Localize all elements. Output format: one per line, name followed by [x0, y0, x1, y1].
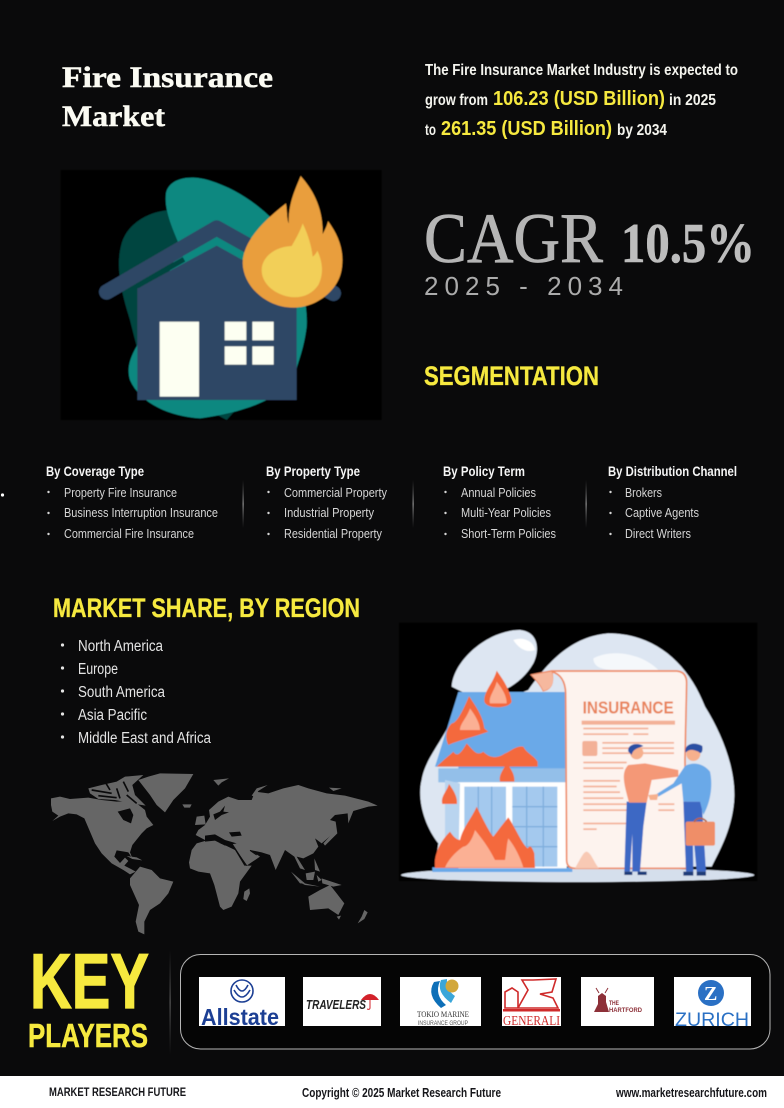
title: Market [62, 100, 165, 133]
region list: North America [78, 638, 163, 655]
cagr [424, 200, 755, 301]
segment: by property type [266, 463, 387, 541]
segment: by distribution channel: Captive Agents [625, 505, 699, 520]
segment: by coverage type: Business Interruption Insurance [64, 505, 218, 520]
market forecast summary: grow from [425, 92, 488, 109]
cagr: 2025 - 2034 [424, 271, 623, 301]
key players heading: PLAYERS [28, 1017, 148, 1054]
segment: by policy term [443, 463, 556, 541]
market share heading: MARKET SHARE, BY REGION [53, 593, 360, 623]
logo: the hartford: THE [609, 1001, 619, 1007]
market forecast summary: 261.35 (USD Billion) [441, 118, 612, 140]
segment: by policy term: By Policy Term [443, 463, 525, 479]
footer: Copyright © 2025 Market Research Future [302, 1086, 501, 1100]
segment: by property type: Industrial Property [284, 505, 374, 520]
man in blue with briefcase [648, 744, 715, 876]
segment: by distribution channel: By Distribution Channel [608, 463, 737, 479]
logo: zurich: Z [704, 983, 717, 1005]
logo: allstate [199, 977, 285, 1030]
region list: Europe [78, 661, 118, 678]
logo: generali [502, 977, 561, 1028]
segment: by property type: By Property Type [266, 463, 360, 479]
logo: travelers: TRAVELERS [306, 997, 366, 1012]
market forecast summary: 106.23 (USD Billion) [493, 88, 665, 110]
logo: allstate: Allstate [201, 1004, 279, 1030]
key players heading [28, 937, 149, 1054]
illustration: house on fire icon [61, 170, 382, 420]
market forecast summary [425, 62, 738, 140]
logo: tokio marine: TOKIO MARINE [417, 1010, 469, 1019]
world map [51, 773, 378, 934]
title [62, 61, 273, 133]
segmentation heading: SEGMENTATION [424, 361, 599, 391]
segment: by coverage type [46, 463, 218, 541]
illustration: insurance handshake and burning building [399, 623, 757, 882]
segment: by policy term: Multi-Year Policies [461, 505, 551, 520]
footer: MARKET RESEARCH FUTURE [49, 1085, 186, 1099]
title: Fire Insurance [62, 61, 273, 94]
region list: Middle East and Africa [78, 730, 211, 747]
segment: by property type: Residential Property [284, 526, 382, 541]
insurance document [532, 671, 687, 868]
market forecast summary: in 2025 [669, 92, 716, 109]
segment: by coverage type: By Coverage Type [46, 463, 144, 479]
segment: by distribution channel: Brokers [625, 485, 662, 500]
region list: Asia Pacific [78, 707, 147, 724]
logo: the hartford: HARTFORD [609, 1008, 643, 1014]
logo: zurich [674, 977, 751, 1031]
segment: by coverage type: Property Fire Insurance [64, 485, 177, 500]
cagr: 10.5% [621, 213, 755, 275]
logo: zurich: ZURICH [675, 1010, 749, 1031]
cagr: CAGR [424, 200, 604, 278]
logo: travelers [303, 977, 381, 1026]
key players heading: KEY [30, 937, 149, 1025]
region list [61, 638, 211, 747]
market forecast summary: by 2034 [617, 122, 667, 139]
document text: INSURANCE [583, 697, 674, 717]
region list: South America [78, 684, 165, 701]
logo: generali: GENERALI [503, 1013, 560, 1028]
logo: the hartford [581, 977, 654, 1026]
illustration: roof flames [435, 671, 538, 868]
footer [0, 1076, 784, 1108]
segment: by distribution channel [608, 463, 737, 541]
segment: by coverage type: Commercial Fire Insurance [64, 526, 194, 541]
segment: by policy term: Annual Policies [461, 485, 536, 500]
market forecast summary: The Fire Insurance Market Industry is expected to [425, 62, 738, 79]
key players panel [180, 954, 770, 1049]
segment: by property type: Commercial Property [284, 485, 387, 500]
market forecast summary: to [425, 122, 436, 139]
segment: by distribution channel: Direct Writers [625, 526, 691, 541]
logo: tokio marine [400, 977, 481, 1027]
man in orange [624, 744, 678, 875]
logo: tokio marine: INSURANCE GROUP [418, 1021, 468, 1027]
stray bullet [1, 493, 4, 497]
segment: by policy term: Short-Term Policies [461, 526, 556, 541]
